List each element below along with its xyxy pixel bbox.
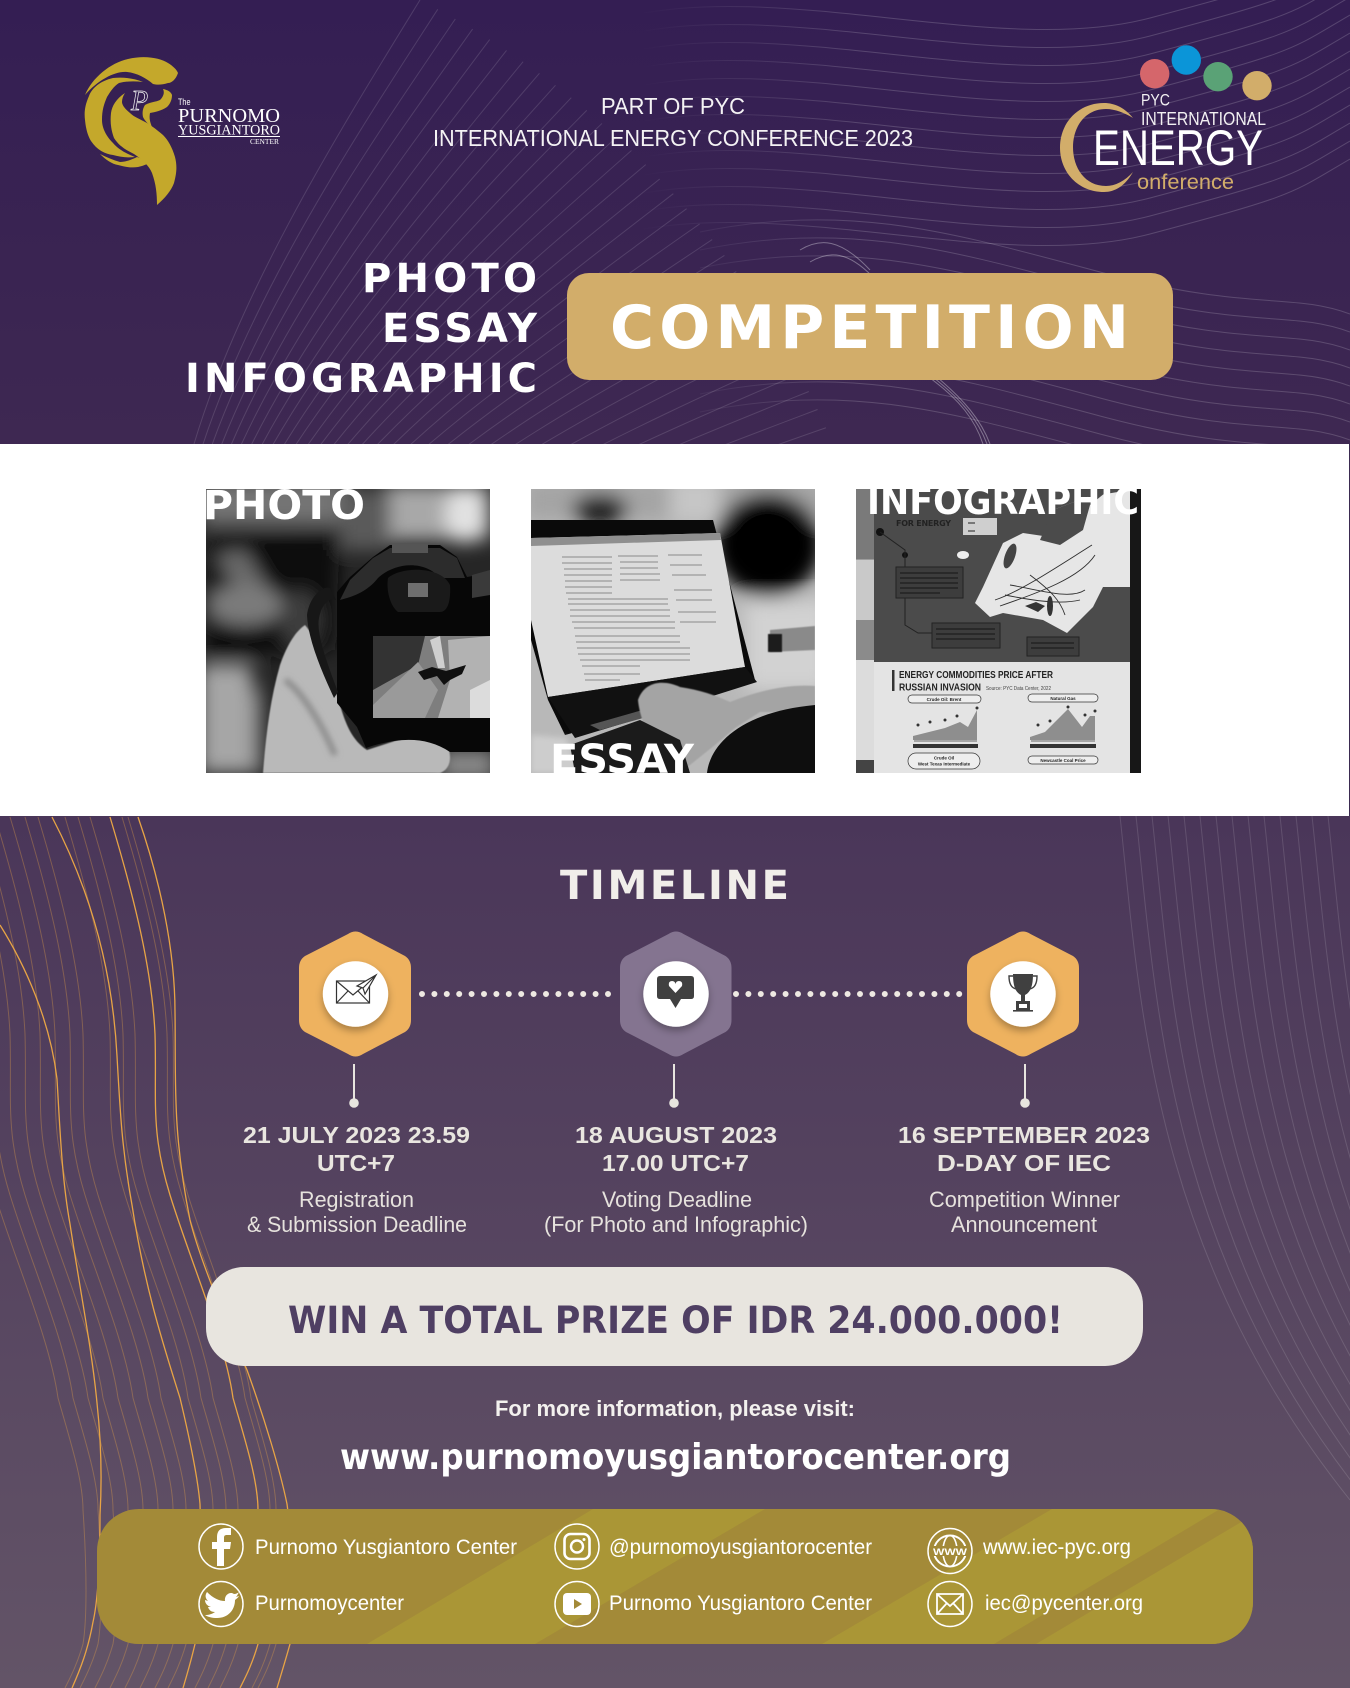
photo: infographic poster: Crude Oil: Brent (927, 697, 962, 702)
logo: Purnomo Yusgiantoro Center (85, 57, 280, 205)
timeline step 2: voting deadline: 18 AUGUST 2023 (575, 1122, 777, 1148)
panel: header background and branding (0, 0, 1350, 444)
logo: Purnomo Yusgiantoro Center: PURNOMO (178, 105, 280, 127)
contact: website: WWW (933, 1547, 968, 1557)
photo: infographic poster (856, 489, 1141, 773)
heading: competition categories (185, 256, 538, 402)
contact: email (928, 1582, 1143, 1626)
contact: facebook: Purnomo Yusgiantoro Center (255, 1536, 517, 1559)
photo: infographic poster: Newcastle Coal Price (1040, 758, 1086, 763)
header subtitle (433, 93, 913, 151)
contact: youtube: Purnomo Yusgiantoro Center (609, 1592, 872, 1615)
timeline step 1: registration deadline: Registration (299, 1187, 414, 1212)
photo: infographic poster: Source: PYC Data Center, 2022 (986, 686, 1051, 692)
timeline step 2: voting deadline: 17.00 UTC+7 (602, 1150, 749, 1176)
logo: PYC International Energy Conference: INTERNATIONAL (1141, 109, 1266, 129)
photo: infographic poster: Natural Gas (1050, 696, 1076, 701)
photo: infographic poster: Crude Oil (934, 756, 954, 760)
photo: infographic poster: West Texas Intermediate (918, 762, 971, 766)
panel: social media contacts (97, 1509, 1253, 1644)
heading: competition categories: INFOGRAPHIC (185, 356, 537, 402)
photo: typing on laptop (525, 480, 830, 773)
logo: PYC International Energy Conference: onference (1137, 171, 1234, 194)
panel: timeline and prize section (0, 816, 1350, 1688)
header subtitle: INTERNATIONAL ENERGY CONFERENCE 2023 (433, 125, 913, 151)
connector: dotted line one (422, 991, 618, 997)
contact: instagram (555, 1524, 872, 1569)
logo: Purnomo Yusgiantoro Center: YUSGIANTORO (178, 122, 280, 138)
badge: competition: COMPETITION (610, 293, 1129, 363)
contact: website (928, 1528, 1131, 1574)
text: more information prompt: For more information, please visit: (495, 1396, 855, 1421)
photo: infographic poster: RUSSIAN INVASION (899, 682, 981, 694)
timeline step 1: registration deadline (243, 932, 470, 1237)
timeline step 3: winner announcement: 16 SEPTEMBER 2023 (898, 1122, 1150, 1148)
contact: twitter: Purnomoycenter (255, 1592, 404, 1615)
timeline step 3: winner announcement: D-DAY OF IEC (937, 1150, 1111, 1176)
text: website url: www.purnomoyusgiantorocenter.org (340, 1437, 1011, 1478)
photo: hand holding camera (200, 480, 495, 780)
callout: total prize (206, 1267, 1143, 1366)
connector: dotted line two (736, 991, 962, 997)
timeline step 2: voting deadline: (For Photo and Infographic) (544, 1212, 808, 1237)
logo: PYC International Energy Conference: ENERGY (1093, 120, 1263, 176)
timeline step 3: winner announcement: Announcement (951, 1212, 1097, 1237)
callout: total prize: WIN A TOTAL PRIZE OF IDR 24.000.000! (288, 1299, 1063, 1342)
badge: competition (567, 273, 1173, 380)
timeline step 2: voting deadline: Voting Deadline (602, 1187, 752, 1212)
logo: Purnomo Yusgiantoro Center: CENTER (250, 137, 279, 146)
icon: envelope with paper plane (336, 975, 376, 1003)
photo: infographic poster: ENERGY COMMODITIES PRICE AFTER (899, 669, 1053, 681)
logo: PYC International Energy Conference (1060, 45, 1272, 194)
contact: facebook (199, 1524, 517, 1569)
heading: competition categories: ESSAY (382, 306, 538, 352)
photo label: INFOGRAPHIC: INFOGRAPHIC (867, 480, 1139, 523)
timeline step 3: winner announcement: Competition Winner (929, 1187, 1120, 1212)
panel: white photo band (206, 444, 1350, 816)
photo label: PHOTO: PHOTO (203, 483, 365, 529)
timeline step 1: registration deadline: 21 JULY 2023 23.59 (243, 1122, 470, 1148)
heading: competition categories: PHOTO (362, 256, 537, 302)
contact: twitter (199, 1582, 404, 1626)
logo: PYC International Energy Conference: PYC (1141, 90, 1170, 110)
contact: youtube (555, 1582, 872, 1626)
contact: website: www.iec-pyc.org (982, 1536, 1131, 1559)
timeline step 2: voting deadline (544, 932, 808, 1237)
contact: instagram: @purnomoyusgiantorocenter (609, 1536, 872, 1559)
contact: email: iec@pycenter.org (985, 1592, 1143, 1615)
timeline step 3: winner announcement (898, 932, 1150, 1237)
timeline step 1: registration deadline: UTC+7 (317, 1150, 395, 1176)
header subtitle: PART OF PYC (601, 93, 745, 119)
logo: Purnomo Yusgiantoro Center: The (178, 97, 190, 107)
icon: speech bubble with heart (657, 976, 694, 1008)
photo: infographic poster: FOR ENERGY (896, 519, 951, 528)
icon: trophy (1009, 974, 1037, 1012)
timeline step 1: registration deadline: & Submission Deadline (247, 1212, 467, 1237)
photo label: ESSAY: ESSAY (550, 737, 695, 783)
heading: timeline: TIMELINE (560, 863, 789, 909)
logo: Purnomo Yusgiantoro Center: P (130, 86, 148, 117)
